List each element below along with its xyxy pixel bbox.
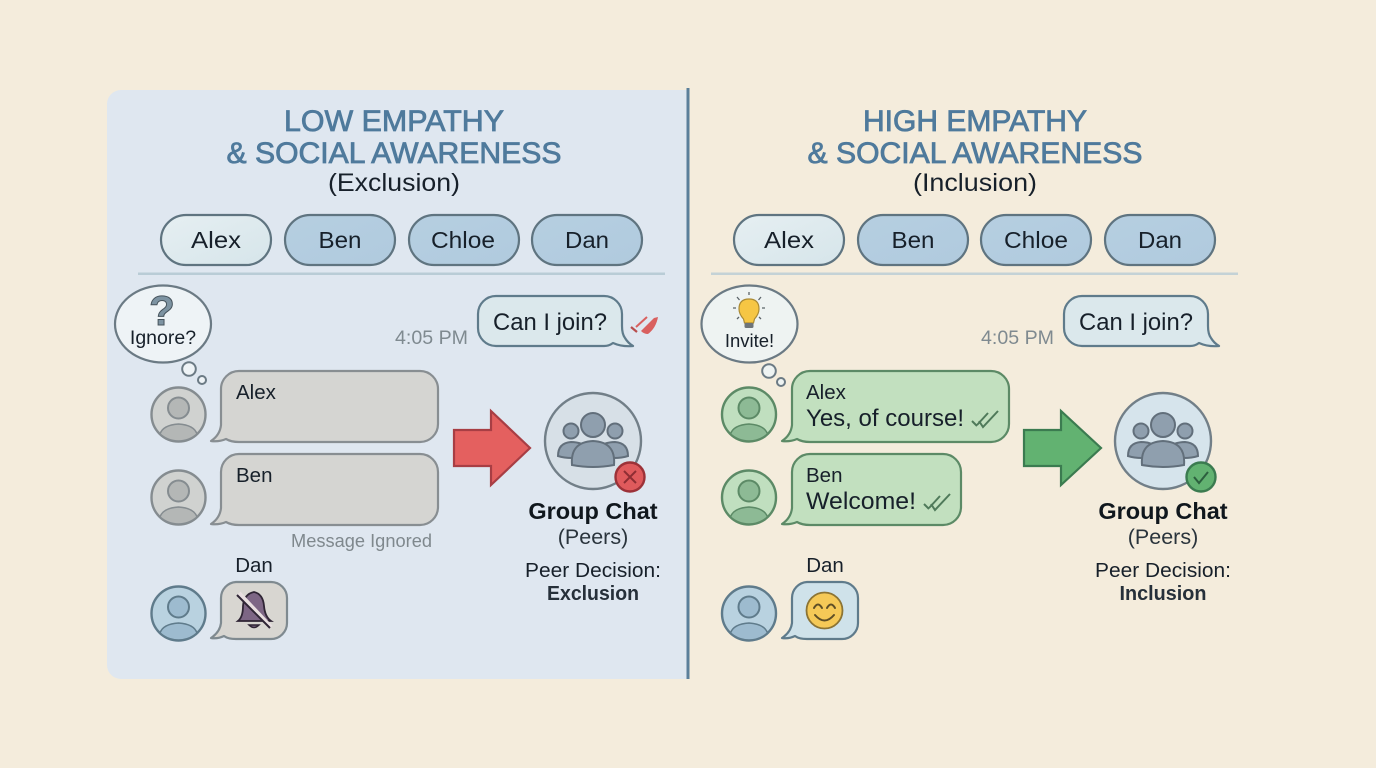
avatar: Alex grey — [152, 388, 206, 442]
bubble: Ben welcome: Welcome! — [806, 488, 916, 515]
heading: high empathy: & SOCIAL AWARENESS — [808, 137, 1142, 170]
heading: high empathy: (Inclusion) — [913, 169, 1037, 197]
icon: double check — [972, 411, 998, 427]
icon: question mark: ? — [149, 287, 175, 334]
heading: low empathy — [226, 105, 562, 197]
icon: failed delivery tick — [631, 317, 658, 334]
thought bubble: ignore — [115, 286, 211, 384]
peer name pills left: Alex — [191, 227, 242, 253]
bubble: can I join right — [1064, 296, 1219, 346]
icon: smiley — [806, 592, 842, 628]
text: group chat left: Exclusion — [547, 583, 639, 605]
text: group chat right: Inclusion — [1120, 583, 1206, 605]
icon: light bulb — [733, 292, 765, 328]
text: group chat right: Peer Decision: — [1095, 560, 1231, 582]
bubble: can I join left — [478, 296, 633, 346]
avatar: Dan left — [152, 586, 206, 640]
label: Dan right: Dan — [806, 554, 844, 577]
peer name pills left: Dan — [565, 227, 609, 253]
peer name pills right: Chloe — [1004, 227, 1068, 253]
avatar: Alex green — [722, 388, 776, 442]
peer name pills right — [734, 215, 1215, 265]
text: group chat left — [525, 498, 661, 605]
bubble: Ben ignored — [211, 454, 438, 525]
text: group chat left: (Peers) — [558, 525, 628, 549]
thought bubble: invite — [702, 286, 798, 386]
icon: double check — [924, 494, 950, 510]
peer name pills right: Dan — [1138, 227, 1182, 253]
text: group chat right: Group Chat — [1098, 498, 1228, 524]
icon: group chat excluded — [545, 393, 644, 492]
avatar: Ben green — [722, 470, 776, 524]
bubble: Dan smile — [782, 582, 858, 639]
icon: group chat included — [1115, 393, 1216, 492]
bubble: Ben welcome — [782, 454, 961, 525]
bubble: Dan muted — [211, 582, 287, 639]
bubble: Alex ignored — [211, 371, 438, 442]
peer name pills right: Alex — [764, 227, 815, 253]
bubble: Alex yes — [782, 371, 1009, 442]
peer name pills right: Ben — [892, 227, 934, 253]
badge: red cross — [616, 462, 644, 492]
panel: low empathy — [107, 88, 690, 679]
text: group chat right: (Peers) — [1128, 525, 1198, 549]
peer name pills left — [161, 215, 642, 265]
timestamp right: 4:05 PM — [981, 328, 1054, 349]
panel divider — [686, 88, 690, 679]
people — [558, 413, 628, 467]
heading: low empathy: & SOCIAL AWARENESS — [226, 137, 562, 170]
label: message ignored: Message Ignored — [291, 531, 432, 551]
badge: green check — [1186, 462, 1216, 492]
text: group chat left: Group Chat — [528, 498, 658, 524]
avatar: Ben grey — [152, 470, 206, 524]
text: group chat left: Peer Decision: — [525, 560, 661, 582]
heading: low empathy: (Exclusion) — [328, 169, 460, 197]
bubble: Alex yes: Yes, of course! — [806, 405, 964, 432]
bubble: can I join right: Can I join? — [1079, 309, 1193, 336]
peer name pills left: Chloe — [431, 227, 495, 253]
icon: muted bell — [237, 592, 271, 628]
bubble: Alex yes: Alex — [806, 381, 847, 404]
bubble: Ben ignored: Ben — [236, 464, 272, 487]
text: group chat right — [1095, 498, 1231, 605]
heading: high empathy — [808, 105, 1142, 197]
bubble: Ben welcome: Ben — [806, 464, 842, 487]
peer name pills left: Ben — [318, 227, 362, 253]
people — [1128, 413, 1198, 467]
avatar: Dan right — [722, 586, 776, 640]
arrow: green — [1024, 411, 1101, 485]
heading: low empathy: LOW EMPATHY — [284, 105, 504, 138]
thought bubble: ignore: Ignore? — [130, 327, 196, 349]
arrow: red — [454, 411, 530, 485]
bubble: Alex ignored: Alex — [236, 381, 277, 404]
bubble: can I join left: Can I join? — [493, 309, 607, 336]
heading: high empathy: HIGH EMPATHY — [863, 105, 1087, 138]
timestamp left: 4:05 PM — [395, 328, 468, 349]
thought bubble: invite: Invite! — [725, 330, 774, 351]
label: Dan left: Dan — [235, 554, 273, 577]
